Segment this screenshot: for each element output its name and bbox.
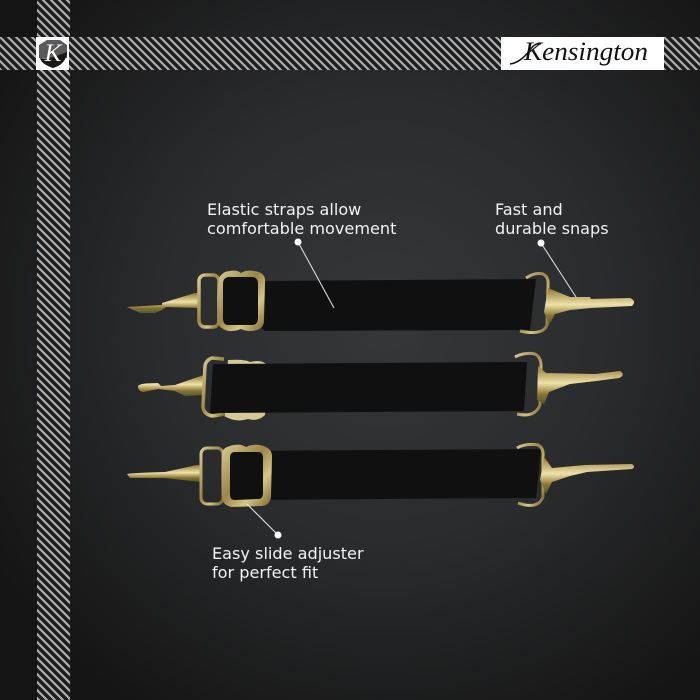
callout: slide adjuster: [212, 504, 364, 582]
hook: top left: [127, 293, 200, 313]
ring: middle right: [515, 353, 541, 415]
logo: Kensington wordmark: Kensington: [523, 37, 648, 66]
ring: top left: [199, 275, 219, 327]
hook: bottom left: [127, 465, 201, 482]
strap assembly: middle: [138, 353, 623, 420]
ring: bottom left: [201, 448, 223, 504]
elastic strap: top: [222, 277, 536, 331]
elastic strap: middle: [210, 362, 527, 413]
strap assembly: top: [127, 271, 634, 333]
callout: snaps: durable snaps: [495, 219, 609, 238]
callout: elastic straps: [207, 200, 396, 308]
callout: snaps: Fast and: [495, 200, 563, 219]
striped vertical band: [37, 0, 70, 700]
hook: top right: [544, 288, 634, 325]
strap assembly: bottom: [127, 444, 634, 507]
elastic strap: bottom: [230, 449, 541, 500]
ring: top right: [520, 274, 548, 333]
callout: elastic straps: Elastic straps allow: [207, 200, 361, 219]
hook: middle right: [537, 366, 623, 404]
callout: snaps: [495, 200, 609, 297]
slider: top: [217, 271, 265, 331]
callout: slide adjuster: Easy slide adjuster: [212, 544, 364, 563]
ring: bottom right: [517, 444, 543, 505]
icon: K shield badge: K: [44, 40, 63, 67]
slider: middle: [224, 360, 267, 420]
slider: bottom: [222, 445, 272, 507]
hook: bottom right: [540, 457, 634, 494]
striped horizontal band: [0, 37, 700, 70]
logo: Kensington wordmark: [501, 37, 664, 70]
hook: middle left: [138, 375, 204, 396]
icon: K shield badge: [36, 37, 69, 70]
callout: slide adjuster: for perfect fit: [212, 563, 318, 582]
ring: middle left: [203, 358, 225, 416]
callout: elastic straps: comfortable movement: [207, 219, 396, 238]
